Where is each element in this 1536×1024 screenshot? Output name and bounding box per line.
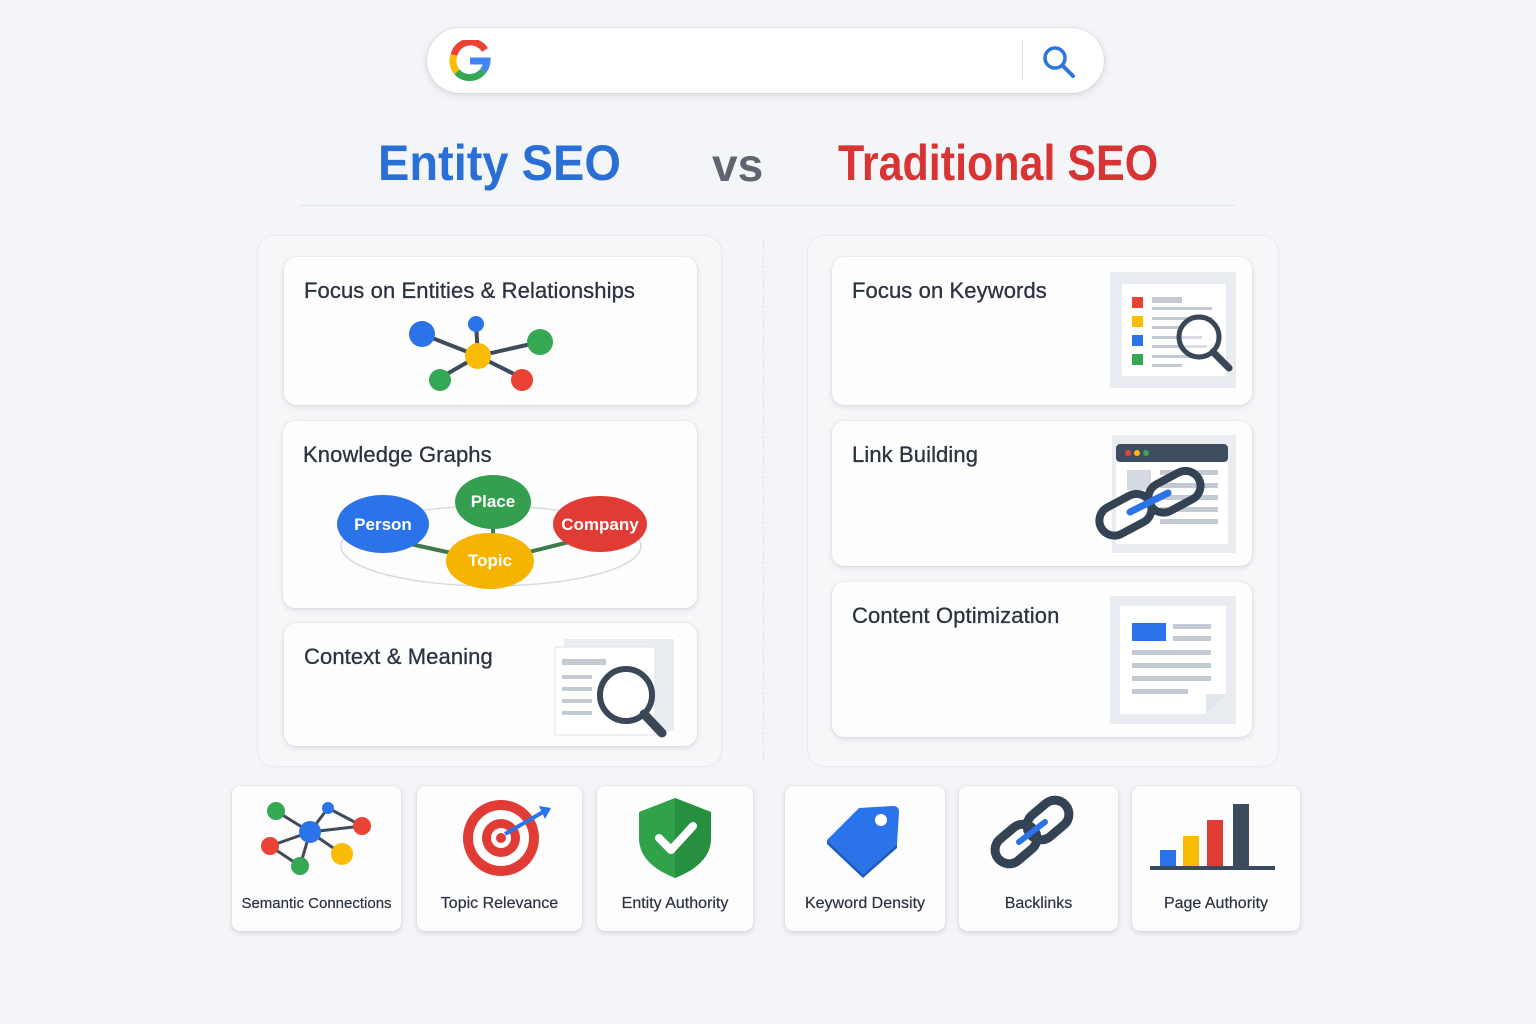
diagram: knowledge graph: Person (354, 515, 412, 534)
panel: entity SEO (258, 236, 721, 766)
tile: keyword density: Keyword Density (805, 895, 925, 912)
card: focus on keywords: Focus on Keywords (852, 278, 1047, 303)
title: Traditional SEO (838, 135, 1158, 191)
tile: topic relevance (417, 786, 582, 931)
panel: traditional SEO (808, 236, 1278, 766)
card: focus on entities: Focus on Entities & Relationships (304, 278, 635, 303)
tile: page authority: Page Authority (1164, 895, 1268, 912)
tile: entity authority (597, 786, 753, 931)
icon: content document (1110, 596, 1236, 724)
diagram: knowledge graph: Place (471, 492, 515, 511)
icon: document with magnifier (554, 639, 674, 738)
diagram: knowledge graph (337, 475, 647, 589)
icon: google G (449, 40, 491, 82)
icon: search magnifier (1043, 46, 1076, 78)
tile: backlinks: Backlinks (1005, 895, 1072, 912)
tile: topic relevance: Topic Relevance (441, 895, 558, 912)
card: knowledge graphs: Knowledge Graphs (303, 442, 492, 467)
diagram: knowledge graph: Company (561, 515, 639, 534)
icon: browser with chain link (1095, 435, 1236, 553)
card: context & meaning: Context & Meaning (304, 644, 493, 669)
tile: page authority (1132, 786, 1300, 931)
tile: backlinks (959, 786, 1118, 931)
title (378, 135, 1158, 191)
search bar (427, 28, 1104, 93)
title: vs (712, 139, 763, 191)
tile: entity authority: Entity Authority (622, 895, 728, 912)
card: content optimization: Content Optimization (852, 603, 1059, 628)
tile: semantic connections (232, 786, 401, 931)
tile: semantic connections: Semantic Connections (241, 895, 392, 912)
card: link building (832, 421, 1252, 566)
card: focus on keywords (832, 257, 1252, 405)
card: focus on entities (284, 257, 697, 405)
tile: keyword density (785, 786, 945, 931)
diagram: knowledge graph: Topic (468, 551, 512, 570)
card: context & meaning (284, 623, 697, 746)
icon: keyword list with magnifier (1110, 272, 1236, 388)
title: Entity SEO (378, 135, 621, 191)
card: content optimization (832, 582, 1252, 737)
icon: entity network (409, 316, 553, 391)
card: knowledge graphs (283, 421, 697, 608)
card: link building: Link Building (852, 442, 978, 467)
